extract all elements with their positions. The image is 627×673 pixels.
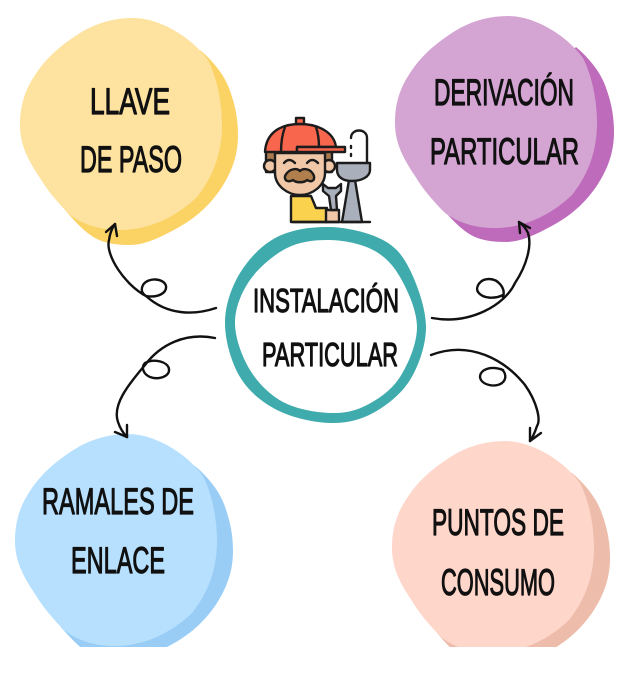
arrow: to derivación particular: [432, 222, 530, 319]
icon: hair and ears: [266, 150, 332, 172]
label: instalación particular: PARTICULAR: [262, 336, 398, 373]
label: puntos de consumo: [434, 508, 564, 596]
icon: moustache: [285, 169, 314, 182]
icon: body: [291, 196, 327, 222]
icon: faucet: [351, 130, 367, 162]
icon: eyes: [284, 160, 318, 163]
label: ramales de enlace: ENLACE: [71, 540, 165, 581]
icon: wrench: [323, 184, 341, 210]
icon: hand: [326, 210, 339, 222]
icon: water drops: [350, 146, 352, 156]
arrow: to puntos de consumo: [431, 350, 541, 441]
icon: cap: [265, 124, 336, 152]
node: puntos de consumo: [392, 441, 610, 668]
icon: sink pedestal: [342, 180, 362, 222]
label: llave de paso: DE PASO: [80, 139, 182, 180]
label: derivación particular: [430, 72, 579, 172]
icon: face: [275, 153, 325, 195]
label: llave de paso: [80, 81, 182, 180]
icon: cap panels: [281, 127, 319, 152]
label: instalación particular: [253, 282, 399, 373]
label: ramales de enlace: RAMALES DE: [42, 481, 194, 522]
node: derivación particular: [395, 16, 614, 242]
icon: floor line: [293, 221, 370, 223]
arrow: to llave de paso: [106, 224, 216, 313]
label: llave de paso: LLAVE: [90, 81, 170, 122]
arrow: to ramales de enlace: [115, 337, 215, 437]
label: ramales de enlace: [44, 487, 194, 574]
label: instalación particular: INSTALACIÓN: [253, 282, 399, 319]
node: ramales de enlace: [15, 434, 233, 661]
central node: instalación particular: [225, 227, 426, 423]
node: llave de paso: [20, 18, 238, 245]
icon: cap brim: [297, 147, 345, 152]
icon: sink basin: [337, 163, 370, 181]
icon: plumber with wrench and sink: [264, 118, 370, 222]
